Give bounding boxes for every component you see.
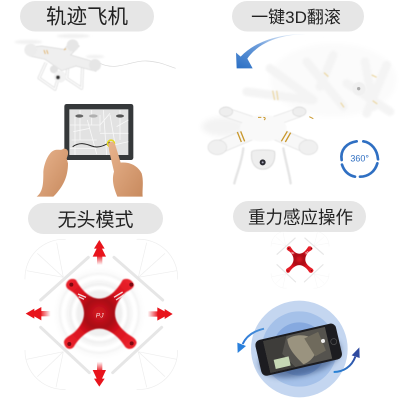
left hand <box>37 149 68 197</box>
arrow: blue curved flip arrow <box>236 34 310 68</box>
arrow: right <box>148 307 173 321</box>
panel: trajectory flight <box>14 1 176 197</box>
heading pill: 3D flip: 一键3D翻滚 <box>251 8 341 27</box>
illustration: main white drone <box>208 107 318 183</box>
heading pill: gravity sensing: 重力感应操作 <box>248 208 353 228</box>
panel: one-key 3D flip <box>202 1 397 183</box>
illustration: white drone with flight trail <box>14 34 176 89</box>
illustration: tablet with route map held by hands <box>37 104 143 197</box>
icon: 360 degree rotation badge: 360° <box>350 153 369 163</box>
illustration: rings, red drone and four red arrows <box>25 239 178 389</box>
heading pill: headless mode <box>28 203 163 234</box>
heading pill: gravity sensing <box>233 201 366 232</box>
arrow: rotate left <box>237 329 264 353</box>
arrow: up <box>93 240 106 265</box>
panel: headless mode <box>25 203 178 389</box>
illustration: small red drone <box>271 231 329 288</box>
logo on drone: PJ <box>96 312 104 319</box>
illustration: ghost drones rotating <box>202 43 397 136</box>
right hand and pointing finger <box>108 142 143 197</box>
heading pill: trajectory flight <box>20 1 154 32</box>
arrow: rotate right <box>334 347 360 372</box>
heading pill: 3D flip <box>232 1 364 32</box>
heading pill: headless mode: 无头模式 <box>57 209 134 231</box>
blue circles <box>251 301 348 397</box>
heading pill: trajectory flight: 轨迹飞机 <box>46 6 128 28</box>
tablet <box>64 104 133 160</box>
arrow: left <box>26 307 51 320</box>
panel: gravity sensing <box>233 201 366 397</box>
red drone top view <box>25 239 178 389</box>
smartphone <box>254 323 345 385</box>
icon: 360 degree rotation badge <box>341 141 378 177</box>
concentric rings <box>53 267 146 360</box>
arrow: down <box>93 362 106 387</box>
illustration: blue circles, phone and rotation arrows <box>237 301 360 397</box>
